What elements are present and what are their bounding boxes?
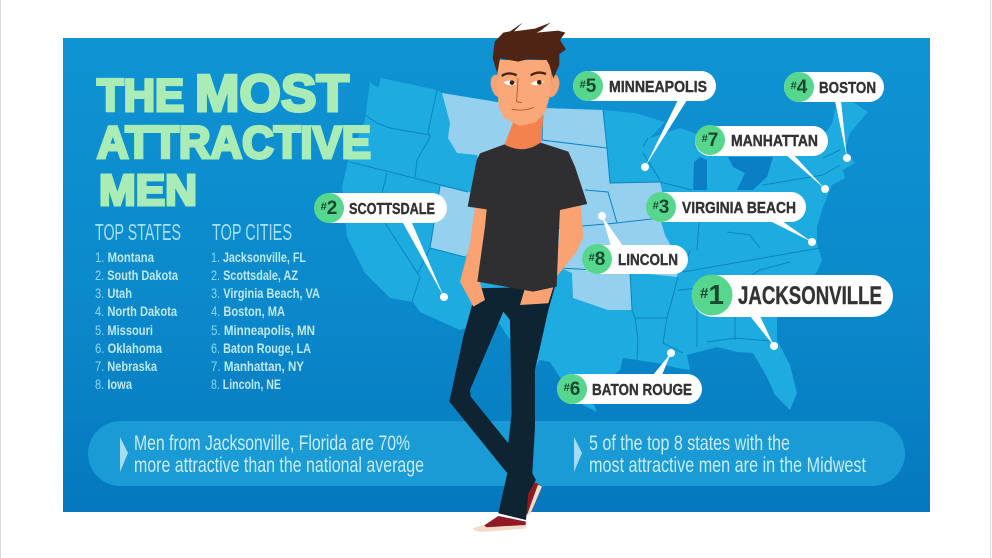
callout: Lincoln: 8 — [595, 249, 605, 270]
banner: bottom facts — [88, 421, 905, 486]
text: Midwest fact: 5 of the top 8 states with the — [589, 432, 790, 455]
callout: Manhattan: # — [702, 133, 708, 145]
list: top cities: 3. Virginia Beach, VA — [211, 285, 320, 301]
callout: Scottsdale: SCOTTSDALE — [349, 201, 435, 218]
title: MEN — [99, 166, 197, 215]
callout: Virginia Beach: 3 — [659, 197, 669, 218]
callout: Minneapolis — [573, 71, 716, 171]
callout: Boston — [784, 72, 884, 162]
title: THE — [97, 70, 184, 121]
list: top cities: 1. Jacksonville, FL — [211, 249, 306, 265]
list: top states: 2. South Dakota — [95, 267, 178, 283]
callout: Jacksonville: 1 — [708, 279, 724, 310]
callout: Baton Rouge — [557, 349, 702, 404]
list: top cities: 7. Manhattan, NY — [211, 358, 305, 374]
callout: Manhattan — [695, 125, 829, 193]
title — [97, 65, 371, 215]
arrow: right fact — [574, 437, 582, 472]
map: outline — [342, 78, 868, 412]
callout: Manhattan: MANHATTAN — [731, 133, 818, 150]
list: top states: 8. Iowa — [95, 376, 132, 392]
list: top states: TOP STATES — [95, 219, 181, 245]
list: top cities: 6. Baton Rouge, LA — [211, 340, 311, 356]
list: top states: 7. Nebraska — [95, 358, 157, 374]
callout: Scottsdale: 2 — [327, 198, 337, 219]
text: Midwest fact: most attractive men are in the Midwest — [589, 454, 866, 477]
man: eyes and mouth — [502, 73, 546, 110]
callout: Minneapolis: # — [580, 79, 586, 91]
callout: Boston: BOSTON — [819, 80, 876, 97]
list: top cities: 2. Scottsdale, AZ — [211, 267, 298, 283]
man: face — [497, 60, 552, 126]
man: front shoe — [473, 516, 526, 532]
callout: Minneapolis: 5 — [586, 76, 597, 97]
man: neck — [504, 117, 543, 152]
callout: Manhattan: 7 — [708, 130, 718, 151]
callout: Baton Rouge: # — [564, 382, 570, 394]
text: Jacksonville fact: Men from Jacksonville, Florida are 70% — [134, 432, 410, 455]
callout: Baton Rouge: BATON ROUGE — [592, 382, 692, 399]
arrow: left fact — [120, 437, 128, 472]
callout: Lincoln — [582, 212, 688, 274]
map: United States — [342, 78, 868, 412]
man: hair — [493, 23, 566, 78]
man: jeans — [449, 287, 555, 520]
list: top states: 6. Oklahoma — [95, 340, 162, 356]
callout: Jacksonville: JACKSONVILLE — [738, 282, 882, 310]
title: MOST — [195, 65, 349, 123]
list: top cities — [211, 219, 320, 392]
callout: Boston: # — [791, 80, 797, 92]
callout: Virginia Beach: # — [653, 200, 659, 212]
list: top cities: 8. Lincoln, NE — [211, 376, 281, 392]
callout: Scottsdale: # — [321, 201, 327, 213]
callout: Jacksonville — [692, 274, 893, 350]
man: ears — [491, 75, 559, 97]
man: t-shirt — [468, 143, 587, 292]
map: state borders — [350, 90, 840, 360]
panel: blue background — [63, 38, 930, 512]
man: back shoe — [526, 482, 542, 516]
list: top states: 3. Utah — [95, 285, 132, 301]
callout: Boston: 4 — [797, 77, 808, 98]
title: ATTRACTIVE — [97, 117, 371, 168]
list: top cities: TOP CITIES — [212, 219, 292, 245]
callout: Baton Rouge: 6 — [570, 379, 580, 400]
text: Midwest fact — [589, 432, 866, 477]
text: Jacksonville fact — [134, 432, 424, 477]
man: right arm — [520, 205, 583, 305]
callout: Scottsdale — [314, 193, 448, 301]
callout: Virginia Beach — [646, 192, 816, 246]
list: top cities: 4. Boston, MA — [211, 303, 285, 319]
callout: Jacksonville: # — [700, 285, 709, 302]
illustration: standing man — [449, 23, 587, 532]
map: highlighted top states — [430, 93, 680, 310]
callout: Virginia Beach: VIRGINIA BEACH — [682, 200, 796, 217]
callout: Lincoln: LINCOLN — [618, 252, 678, 269]
man: left arm — [460, 207, 488, 307]
map: great lakes — [693, 157, 773, 190]
list: top states — [95, 219, 181, 392]
list: top states: 1. Montana — [95, 249, 154, 265]
list: top states: 4. North Dakota — [95, 303, 177, 319]
callout: Minneapolis: MINNEAPOLIS — [609, 79, 707, 96]
text: Jacksonville fact: more attractive than the national average — [134, 454, 424, 477]
callout: Lincoln: # — [589, 252, 595, 264]
list: top states: 5. Missouri — [95, 322, 153, 338]
list: top cities: 5. Minneapolis, MN — [211, 322, 315, 338]
